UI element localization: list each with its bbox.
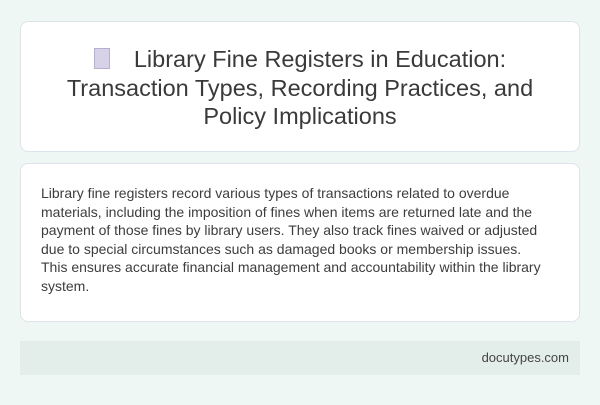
footer [20,341,580,375]
description text: Library fine registers record various types of transactions related to overdue materials, including the imposition of fines when items are returned late and the payment of those fines by library users. They also track fines waived or adjusted due to special circumstances such as damaged books or membership issues. This ensures accurate financial management and accountability within the library system. [41,185,541,294]
icon: receipt [94,48,110,69]
body card [20,163,580,322]
header card [20,21,580,152]
footer credit: docutypes.com [482,350,569,365]
title: Library Fine Registers in Education: Transaction Types, Recording Practices, and Policy Implications [67,46,533,129]
